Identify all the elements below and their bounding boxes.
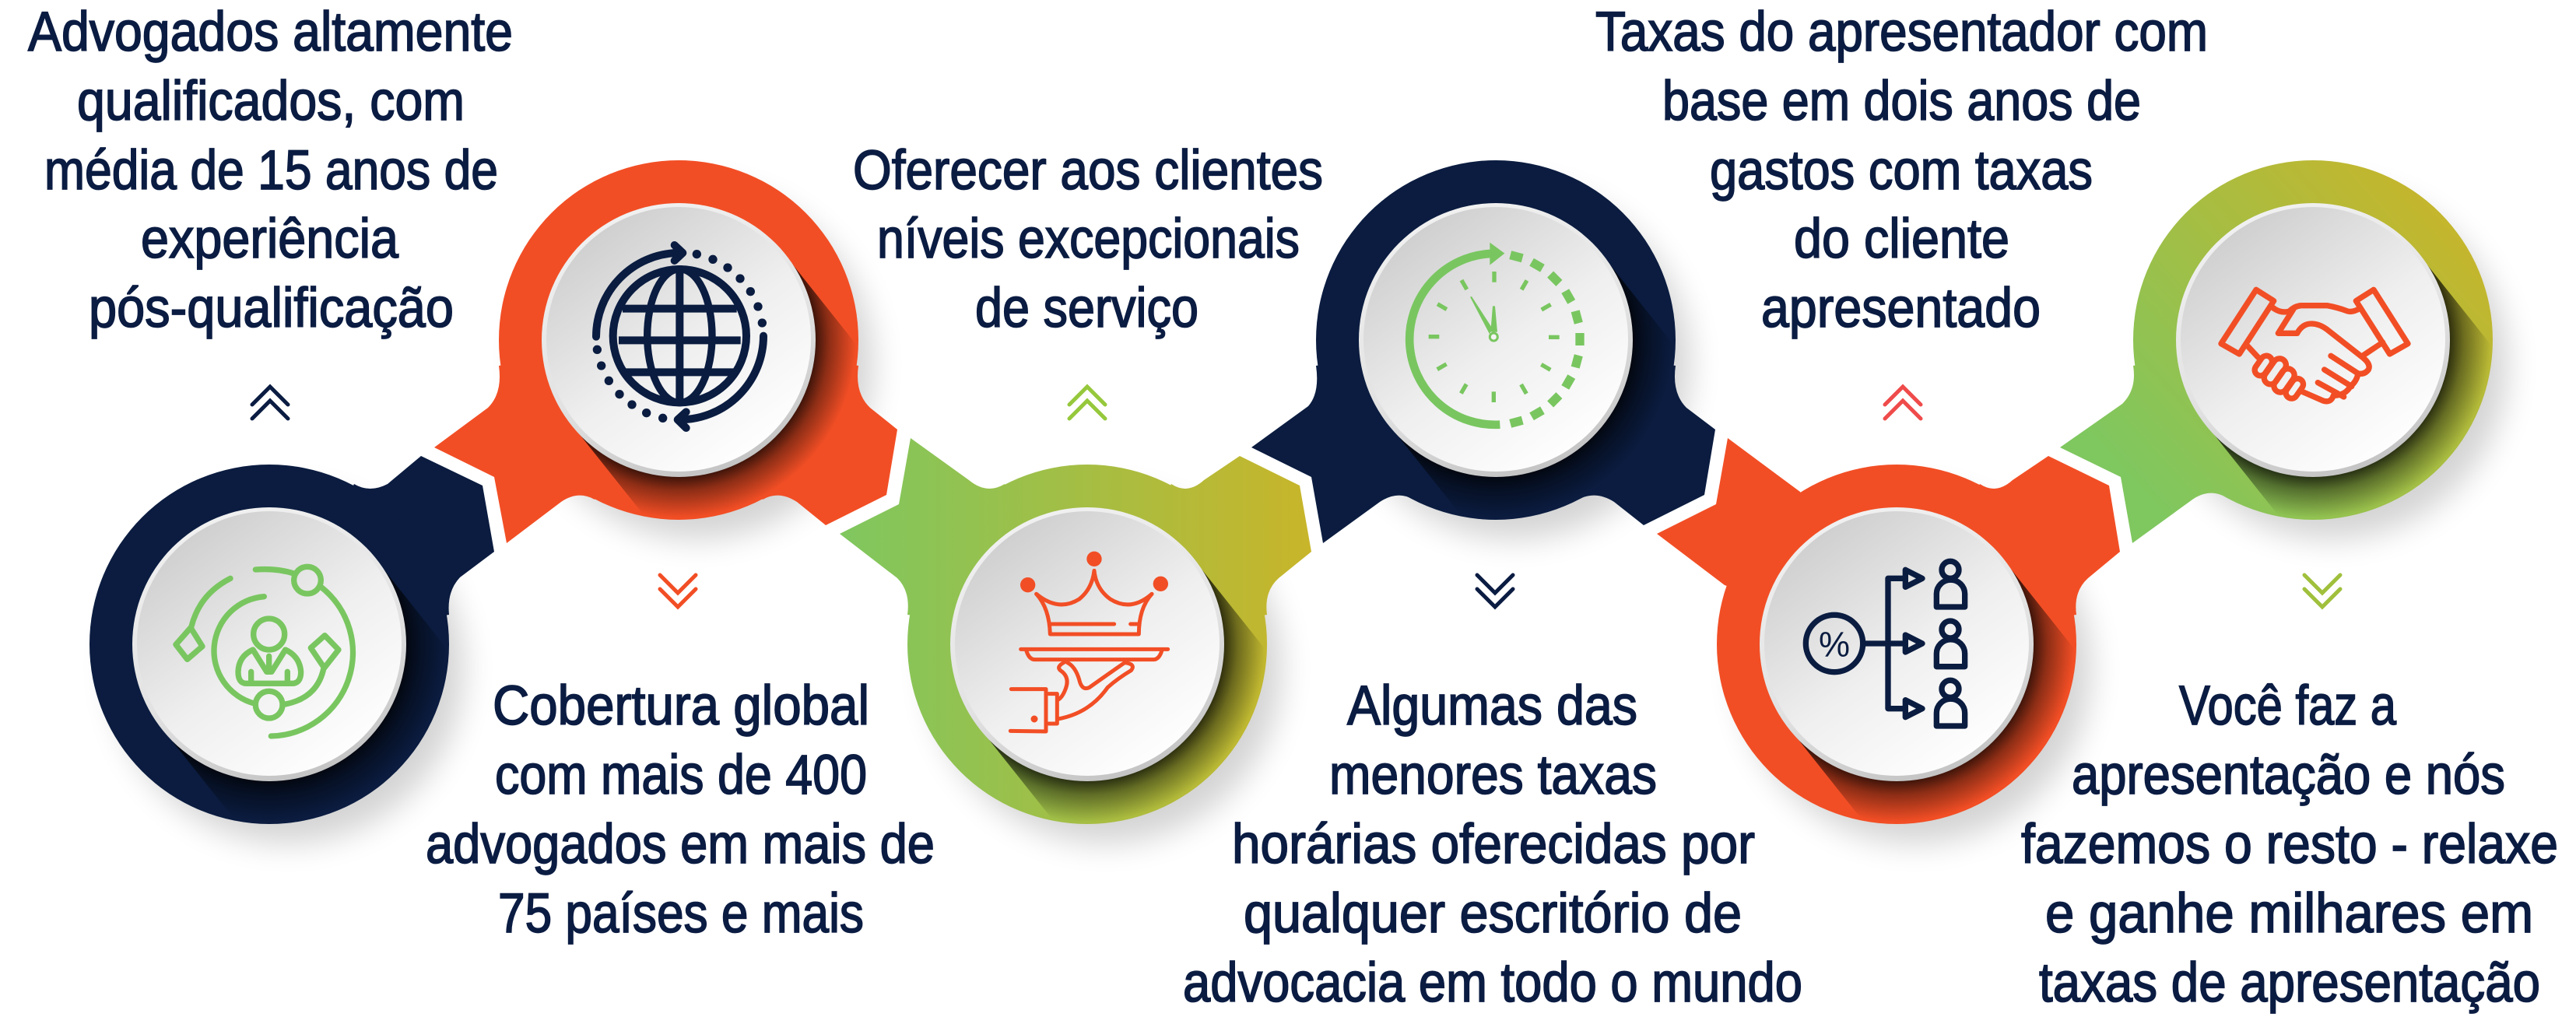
text: step 4: menores taxas: [1329, 745, 1657, 806]
text: step 5: do cliente: [1794, 209, 2009, 270]
soft drop shadows: [112, 188, 2508, 843]
text: step 5: Taxas do apresentador com: [1595, 2, 2208, 63]
chevrons: step 6 down: [2304, 575, 2340, 607]
icon: percentage split to three people: [1806, 561, 1965, 726]
text: step 5: gastos com taxas: [1710, 140, 2093, 202]
text: step 3: de serviço: [975, 278, 1199, 339]
text: step 4: [1183, 675, 1802, 1014]
text: step 2: advogados em mais de: [426, 814, 935, 875]
step 3 green node with arms: [840, 438, 1311, 824]
text: step 5: [1595, 2, 2208, 339]
text: step 5: base em dois anos de: [1662, 71, 2141, 132]
chevrons: step 5 up: [1885, 387, 1921, 419]
icon: lawyer with orbit: [176, 566, 353, 736]
chevrons: step 1 up: [252, 387, 288, 419]
icon: handshake: [2221, 289, 2408, 402]
chevrons: step 2 down: [660, 575, 696, 607]
text: step 2: 75 países e mais: [498, 883, 864, 945]
text: step 3: níveis excepcionais: [877, 209, 1300, 270]
step 6 green node with arm: [2060, 160, 2493, 543]
chevrons: step 3 up: [1069, 387, 1105, 419]
chevrons: step 4 down: [1477, 575, 1513, 607]
text: step 4: Algumas das: [1347, 675, 1637, 737]
icon: clock with circular arrow: [1409, 243, 1585, 428]
icon: crown on serving tray: [1010, 552, 1168, 731]
text: step 1: pós-qualificação: [89, 278, 454, 339]
text: step 4: advocacia em todo o mundo: [1183, 952, 1802, 1014]
step 1 navy node with arm: [89, 456, 494, 824]
text: step 3: [853, 140, 1323, 339]
text: step 4: horárias oferecidas por: [1232, 814, 1755, 875]
step 4 navy node with arms: [1251, 160, 1715, 543]
text: step 6: apresentação e nós: [2072, 745, 2505, 806]
text: step 2: [426, 675, 935, 945]
text: step 1: [28, 2, 513, 339]
text: step 2: Cobertura global: [493, 675, 869, 737]
text: step 1: média de 15 anos de: [44, 140, 498, 202]
step 2 orange node with arms: [434, 160, 897, 543]
text: step 1: Advogados altamente: [28, 2, 513, 63]
text: step 2: com mais de 400: [495, 745, 867, 806]
text: step 1: experiência: [141, 209, 398, 270]
icon: percentage split to three people: %: [1819, 624, 1850, 664]
step 5 orange node with arms: [1657, 438, 2120, 824]
text: step 6: e ganhe milhares em: [2045, 883, 2533, 945]
icon: globe with rotating arrows: [593, 245, 767, 428]
text: step 1: qualificados, com: [77, 71, 465, 132]
text: step 5: apresentado: [1761, 278, 2041, 339]
text: step 3: Oferecer aos clientes: [853, 140, 1323, 202]
text: step 6: Você faz a: [2179, 675, 2396, 737]
text: step 6: [2021, 675, 2558, 1014]
text: step 4: qualquer escritório de: [1244, 883, 1742, 945]
